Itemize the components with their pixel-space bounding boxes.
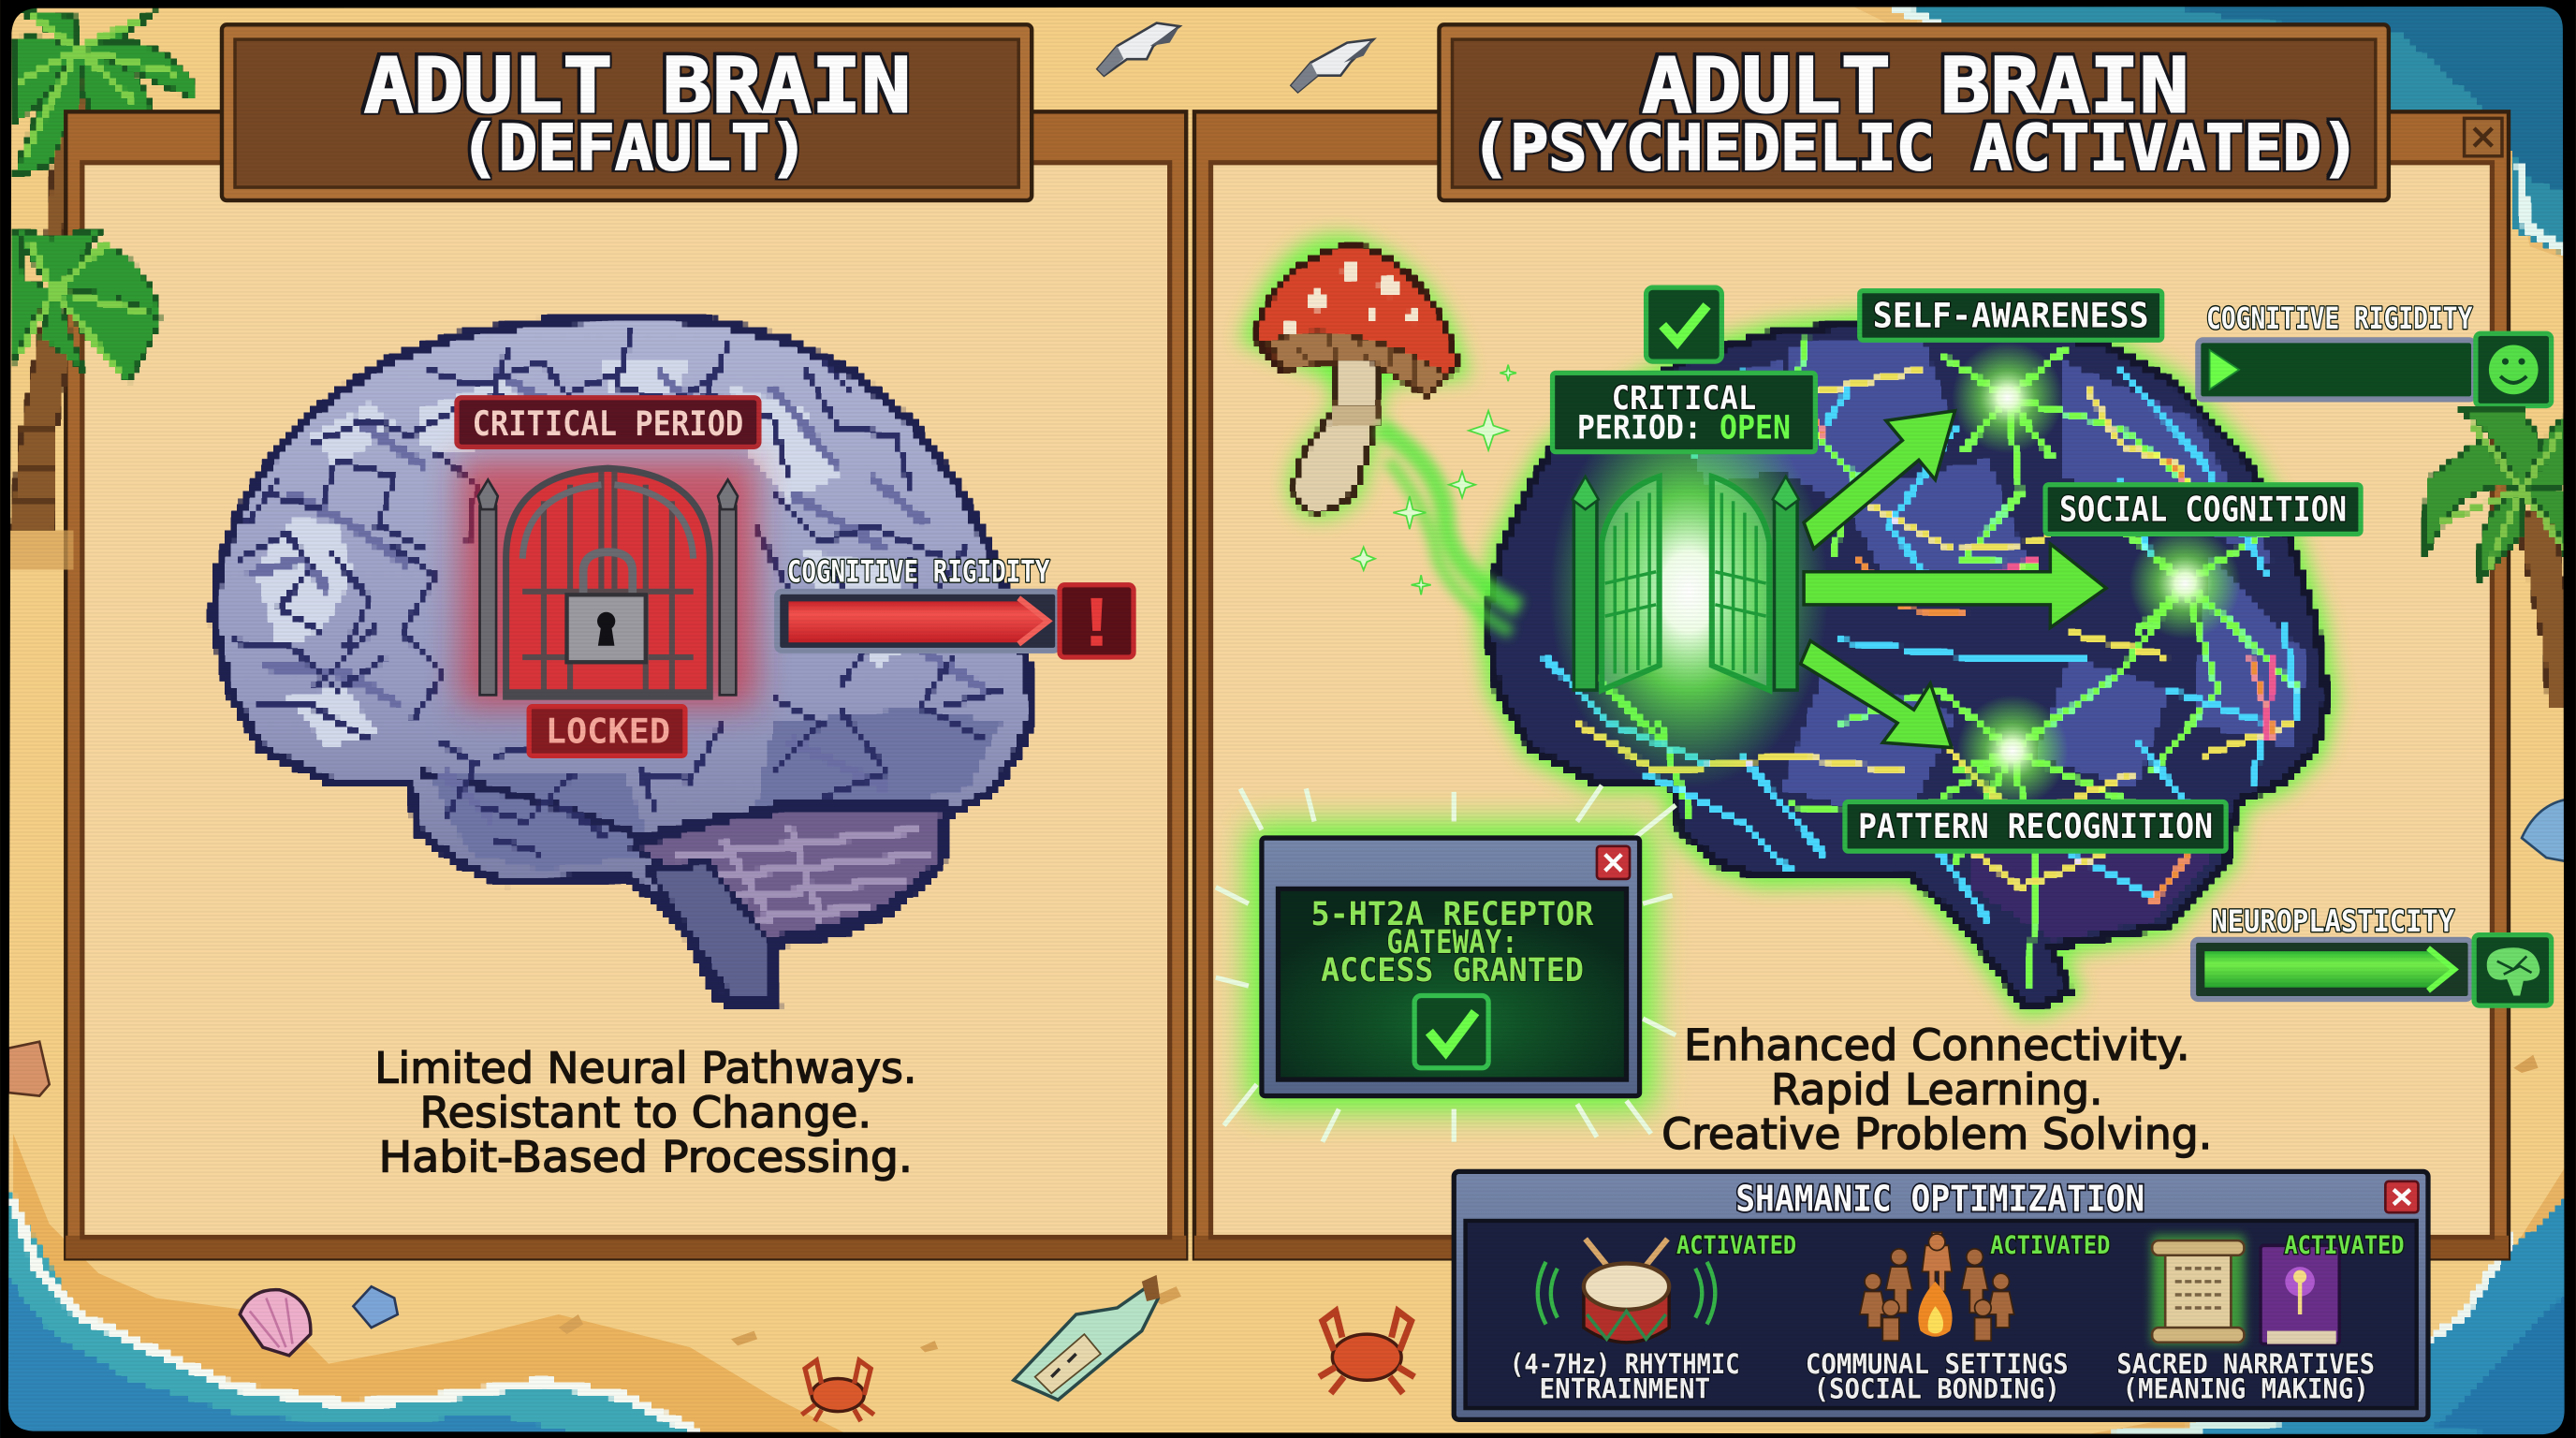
description: activated brain: Rapid Learning.: [1771, 1064, 2102, 1114]
description: default brain: Resistant to Change.: [419, 1088, 871, 1137]
description: activated brain: Creative Problem Solving.: [1661, 1109, 2212, 1159]
label: critical period open: CRITICAL: [1612, 379, 1756, 418]
palm tree: left middle: [7, 230, 159, 566]
window: 5-HT2A receptor gateway: 5-HT2A RECEPTOR: [1311, 895, 1594, 933]
panel: shamanic optimization: (4-7Hz) RHYTHMIC: [1510, 1348, 1740, 1380]
ocean: top right: [1881, 0, 2576, 259]
label: social cognition: SOCIAL COGNITION: [2059, 489, 2347, 529]
description: default brain: Limited Neural Pathways.: [374, 1044, 916, 1093]
panel: activated brain frame: [1194, 111, 2509, 1258]
label: pattern recognition: PATTERN RECOGNITION: [1858, 806, 2213, 846]
description: activated brain: Enhanced Connectivity.: [1684, 1020, 2190, 1070]
icon: pink shell: [240, 1290, 311, 1356]
icon: small brain: [2474, 935, 2552, 1005]
arrow: to self-awareness: [1804, 411, 1955, 549]
panel: shamanic optimization: [1454, 1171, 2428, 1419]
panel: shamanic optimization: ACTIVATED: [2284, 1232, 2405, 1260]
gauge: cognitive rigidity high: COGNITIVE RIGIDITY: [787, 555, 1050, 589]
gauge: neuroplasticity: [2193, 905, 2552, 1005]
window: 5-HT2A receptor gateway: GATEWAY:: [1386, 923, 1518, 961]
label: locked: [529, 707, 685, 756]
icon: smile: [2476, 333, 2552, 405]
panel: shamanic optimization: ENTRAINMENT: [1540, 1373, 1710, 1405]
title: adult brain psychedelic activated: ADULT BRAIN: [1642, 42, 2189, 130]
palm tree: top left: [15, 10, 194, 246]
title: adult brain default: (DEFAULT): [460, 111, 809, 184]
icon: small crab: [802, 1360, 874, 1421]
panel: shamanic optimization: SACRED NARRATIVES: [2116, 1348, 2375, 1380]
gauge: cognitive rigidity low: [2198, 302, 2552, 405]
arrow: to social cognition: [1804, 544, 2106, 627]
window: 5-HT2A receptor gateway: ACCESS GRANTED: [1321, 951, 1584, 990]
icon: drum: [1538, 1239, 1715, 1343]
seagull left: [1097, 23, 1179, 76]
icon: padlock: [567, 552, 646, 662]
green spore trail: [1352, 365, 1519, 633]
title: adult brain psychedelic activated: [1439, 24, 2389, 200]
icon: blue shell: [353, 1286, 398, 1328]
icon: blue shell right: [2522, 799, 2572, 862]
icon: book: [2261, 1245, 2339, 1344]
ocean: bottom left: [0, 1183, 698, 1438]
gauge: neuroplasticity: NEUROPLASTICITY: [2211, 905, 2454, 939]
window: 5-HT2A receptor gateway: [1216, 785, 1676, 1142]
icon: mushroom: [1251, 244, 1457, 511]
label: critical period: CRITICAL PERIOD: [473, 404, 743, 444]
icon: scroll: [2152, 1236, 2244, 1344]
icon: message in a bottle: [1014, 1275, 1160, 1400]
icon: wooden close button: [2465, 118, 2502, 156]
panel: shamanic optimization: ACTIVATED: [1990, 1232, 2110, 1260]
title: adult brain default: [222, 24, 1032, 200]
panel: default brain frame: [66, 111, 1186, 1258]
icon: close: [1597, 846, 1630, 879]
panel: shamanic optimization: ACTIVATED: [1676, 1232, 1796, 1260]
gauge: cognitive rigidity high: [777, 555, 1134, 657]
seagull right: [1292, 39, 1373, 92]
open critical period gate: [1573, 477, 1799, 690]
locked critical period gate: [460, 460, 755, 707]
panel: shamanic optimization: SHAMANIC OPTIMIZATION: [1735, 1178, 2144, 1220]
ocean: bottom right: [2070, 1191, 2576, 1438]
description: default brain: Habit-Based Processing.: [379, 1132, 913, 1181]
label: locked: LOCKED: [546, 711, 670, 751]
icon: communal fire circle: [1860, 1232, 2014, 1341]
description: default brain: [374, 1044, 916, 1181]
icon: large crab: [1319, 1312, 1414, 1393]
brain: default grey: [213, 317, 1032, 1004]
gauge: cognitive rigidity low: COGNITIVE RIGIDITY: [2206, 302, 2472, 336]
label: self-awareness: SELF-AWARENESS: [1873, 295, 2149, 335]
icon: check granted: [1414, 996, 1488, 1068]
title: adult brain default: ADULT BRAIN: [364, 42, 911, 130]
panel: shamanic optimization: (MEANING MAKING): [2123, 1373, 2369, 1405]
panel: shamanic optimization: (SOCIAL BONDING): [1814, 1373, 2060, 1405]
right palm tree: [2423, 411, 2576, 710]
arrow: to pattern recognition: [1801, 640, 1952, 748]
icon: warning: [1060, 585, 1134, 657]
icon: close: [2385, 1181, 2418, 1212]
title: adult brain psychedelic activated: (PSYCHEDELIC ACTIVATED): [1471, 111, 2360, 184]
label: critical period open: PERIOD: OPEN: [1577, 409, 1791, 448]
label: critical period open: [1553, 373, 1815, 452]
brain: activated neon: [1486, 324, 2326, 1004]
icon: check above critical period: [1647, 287, 1721, 361]
icon: left rock shell: [8, 1042, 50, 1096]
panel: shamanic optimization: COMMUNAL SETTINGS: [1806, 1348, 2069, 1380]
description: activated brain: [1661, 1020, 2212, 1159]
